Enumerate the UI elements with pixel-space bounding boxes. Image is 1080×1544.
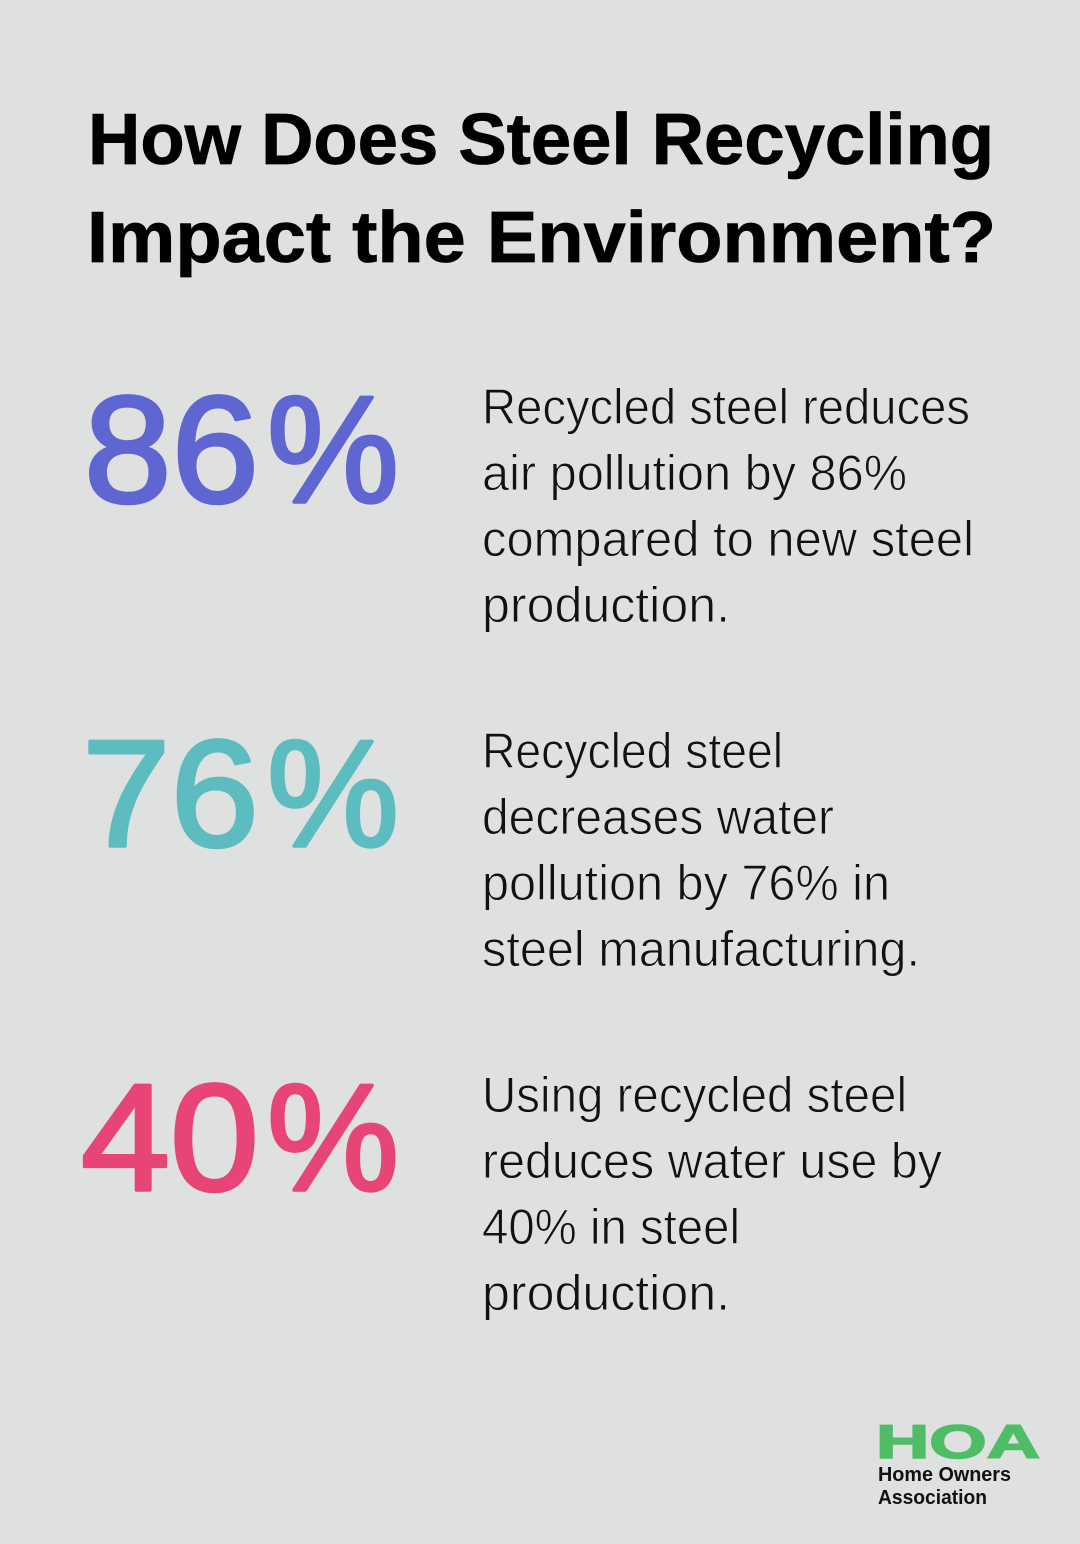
logo: Home Owners Association	[876, 1415, 1040, 1509]
number: 40%	[81, 1053, 399, 1223]
title: Impact the Environment?	[87, 198, 996, 278]
description: air pollution: compared to new steel	[482, 511, 974, 567]
title: How Does Steel Recycling	[88, 100, 994, 180]
description: air pollution: Recycled steel reduces	[482, 379, 970, 435]
number: 40%: 40	[81, 1053, 259, 1223]
description: water pollution: Recycled steel	[482, 723, 783, 779]
description: air pollution	[482, 379, 974, 633]
number: 40%: %	[267, 1053, 399, 1223]
number: 76%: %	[267, 709, 399, 879]
title	[87, 100, 996, 278]
description: air pollution: production.	[482, 577, 730, 633]
number: 86%	[84, 365, 399, 535]
logo mark: HOA: HOA	[876, 1415, 1040, 1468]
logo name: Home Owners	[878, 1464, 1011, 1486]
description: water pollution	[482, 723, 920, 977]
number: 76%	[82, 709, 399, 879]
description: water use: reduces water use by	[482, 1133, 942, 1189]
number: 86%: %	[267, 365, 399, 535]
description: water pollution: decreases water	[482, 789, 834, 845]
description: water pollution: pollution by 76% in	[482, 855, 890, 911]
number: 76%: 76	[82, 709, 259, 879]
description: water use: 40% in steel	[482, 1199, 740, 1255]
logo name	[878, 1464, 1011, 1509]
stat: 86% air pollution	[84, 365, 974, 633]
description: water pollution: steel manufacturing.	[482, 921, 920, 977]
stat: 40% water use	[81, 1053, 942, 1321]
description: air pollution: air pollution by 86%	[482, 445, 907, 501]
number: 86%: 86	[84, 365, 259, 535]
description: water use	[482, 1067, 942, 1321]
description: water use: Using recycled steel	[482, 1067, 907, 1123]
stat: 76% water pollution	[82, 709, 920, 977]
logo name: Association	[878, 1487, 987, 1509]
description: water use: production.	[482, 1265, 730, 1321]
